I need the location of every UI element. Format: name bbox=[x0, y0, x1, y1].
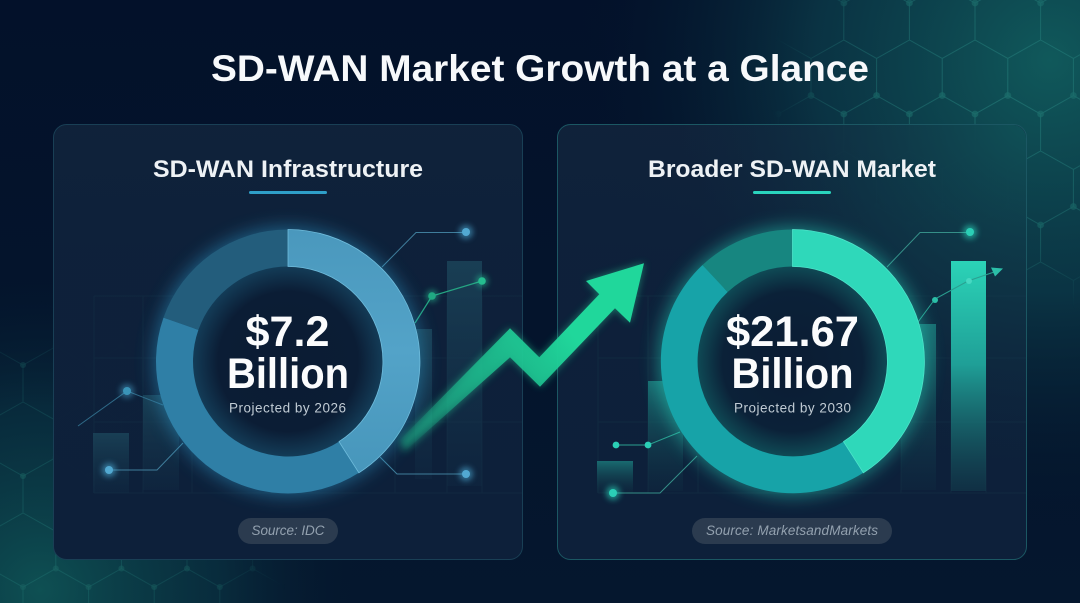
connector lines and dots bbox=[78, 225, 488, 481]
source pill: IDC: Source: IDC bbox=[252, 523, 325, 538]
source pill: MarketsandMarkets bbox=[692, 518, 892, 544]
donut chart: infrastructure bbox=[154, 228, 422, 496]
caption: Projected by 2026: Projected by 2026 bbox=[229, 400, 346, 416]
caption: Projected by 2030: Projected by 2030 bbox=[734, 400, 851, 416]
panel: SD-WAN Infrastructure bbox=[54, 124, 522, 560]
arrow: growth bbox=[400, 263, 644, 452]
value: $7.2 Billion bbox=[227, 308, 349, 398]
source pill: MarketsandMarkets: Source: MarketsandMarkets bbox=[706, 523, 878, 538]
source pill: IDC bbox=[238, 518, 338, 544]
value: $7.2 Billion: Billion bbox=[227, 350, 349, 398]
background bars bbox=[597, 261, 986, 493]
panel: Broader SD-WAN Market bbox=[558, 124, 1026, 560]
title: SD-WAN Market Growth at a Glance bbox=[211, 47, 869, 89]
heading underline bbox=[753, 191, 831, 194]
value: $7.2 Billion: $7.2 bbox=[246, 308, 330, 356]
connector lines, dots and small arrow bbox=[606, 225, 1003, 500]
heading: SD-WAN Infrastructure: SD-WAN Infrastructure bbox=[153, 156, 423, 183]
donut chart: broader market bbox=[658, 228, 926, 496]
value: $21.67 Billion: Billion bbox=[732, 350, 854, 398]
background bars bbox=[93, 261, 482, 493]
heading: Broader SD-WAN Market: Broader SD-WAN Market bbox=[648, 156, 936, 183]
value: $21.67 Billion bbox=[726, 308, 859, 398]
value: $21.67 Billion: $21.67 bbox=[726, 308, 859, 356]
heading underline bbox=[249, 191, 327, 194]
